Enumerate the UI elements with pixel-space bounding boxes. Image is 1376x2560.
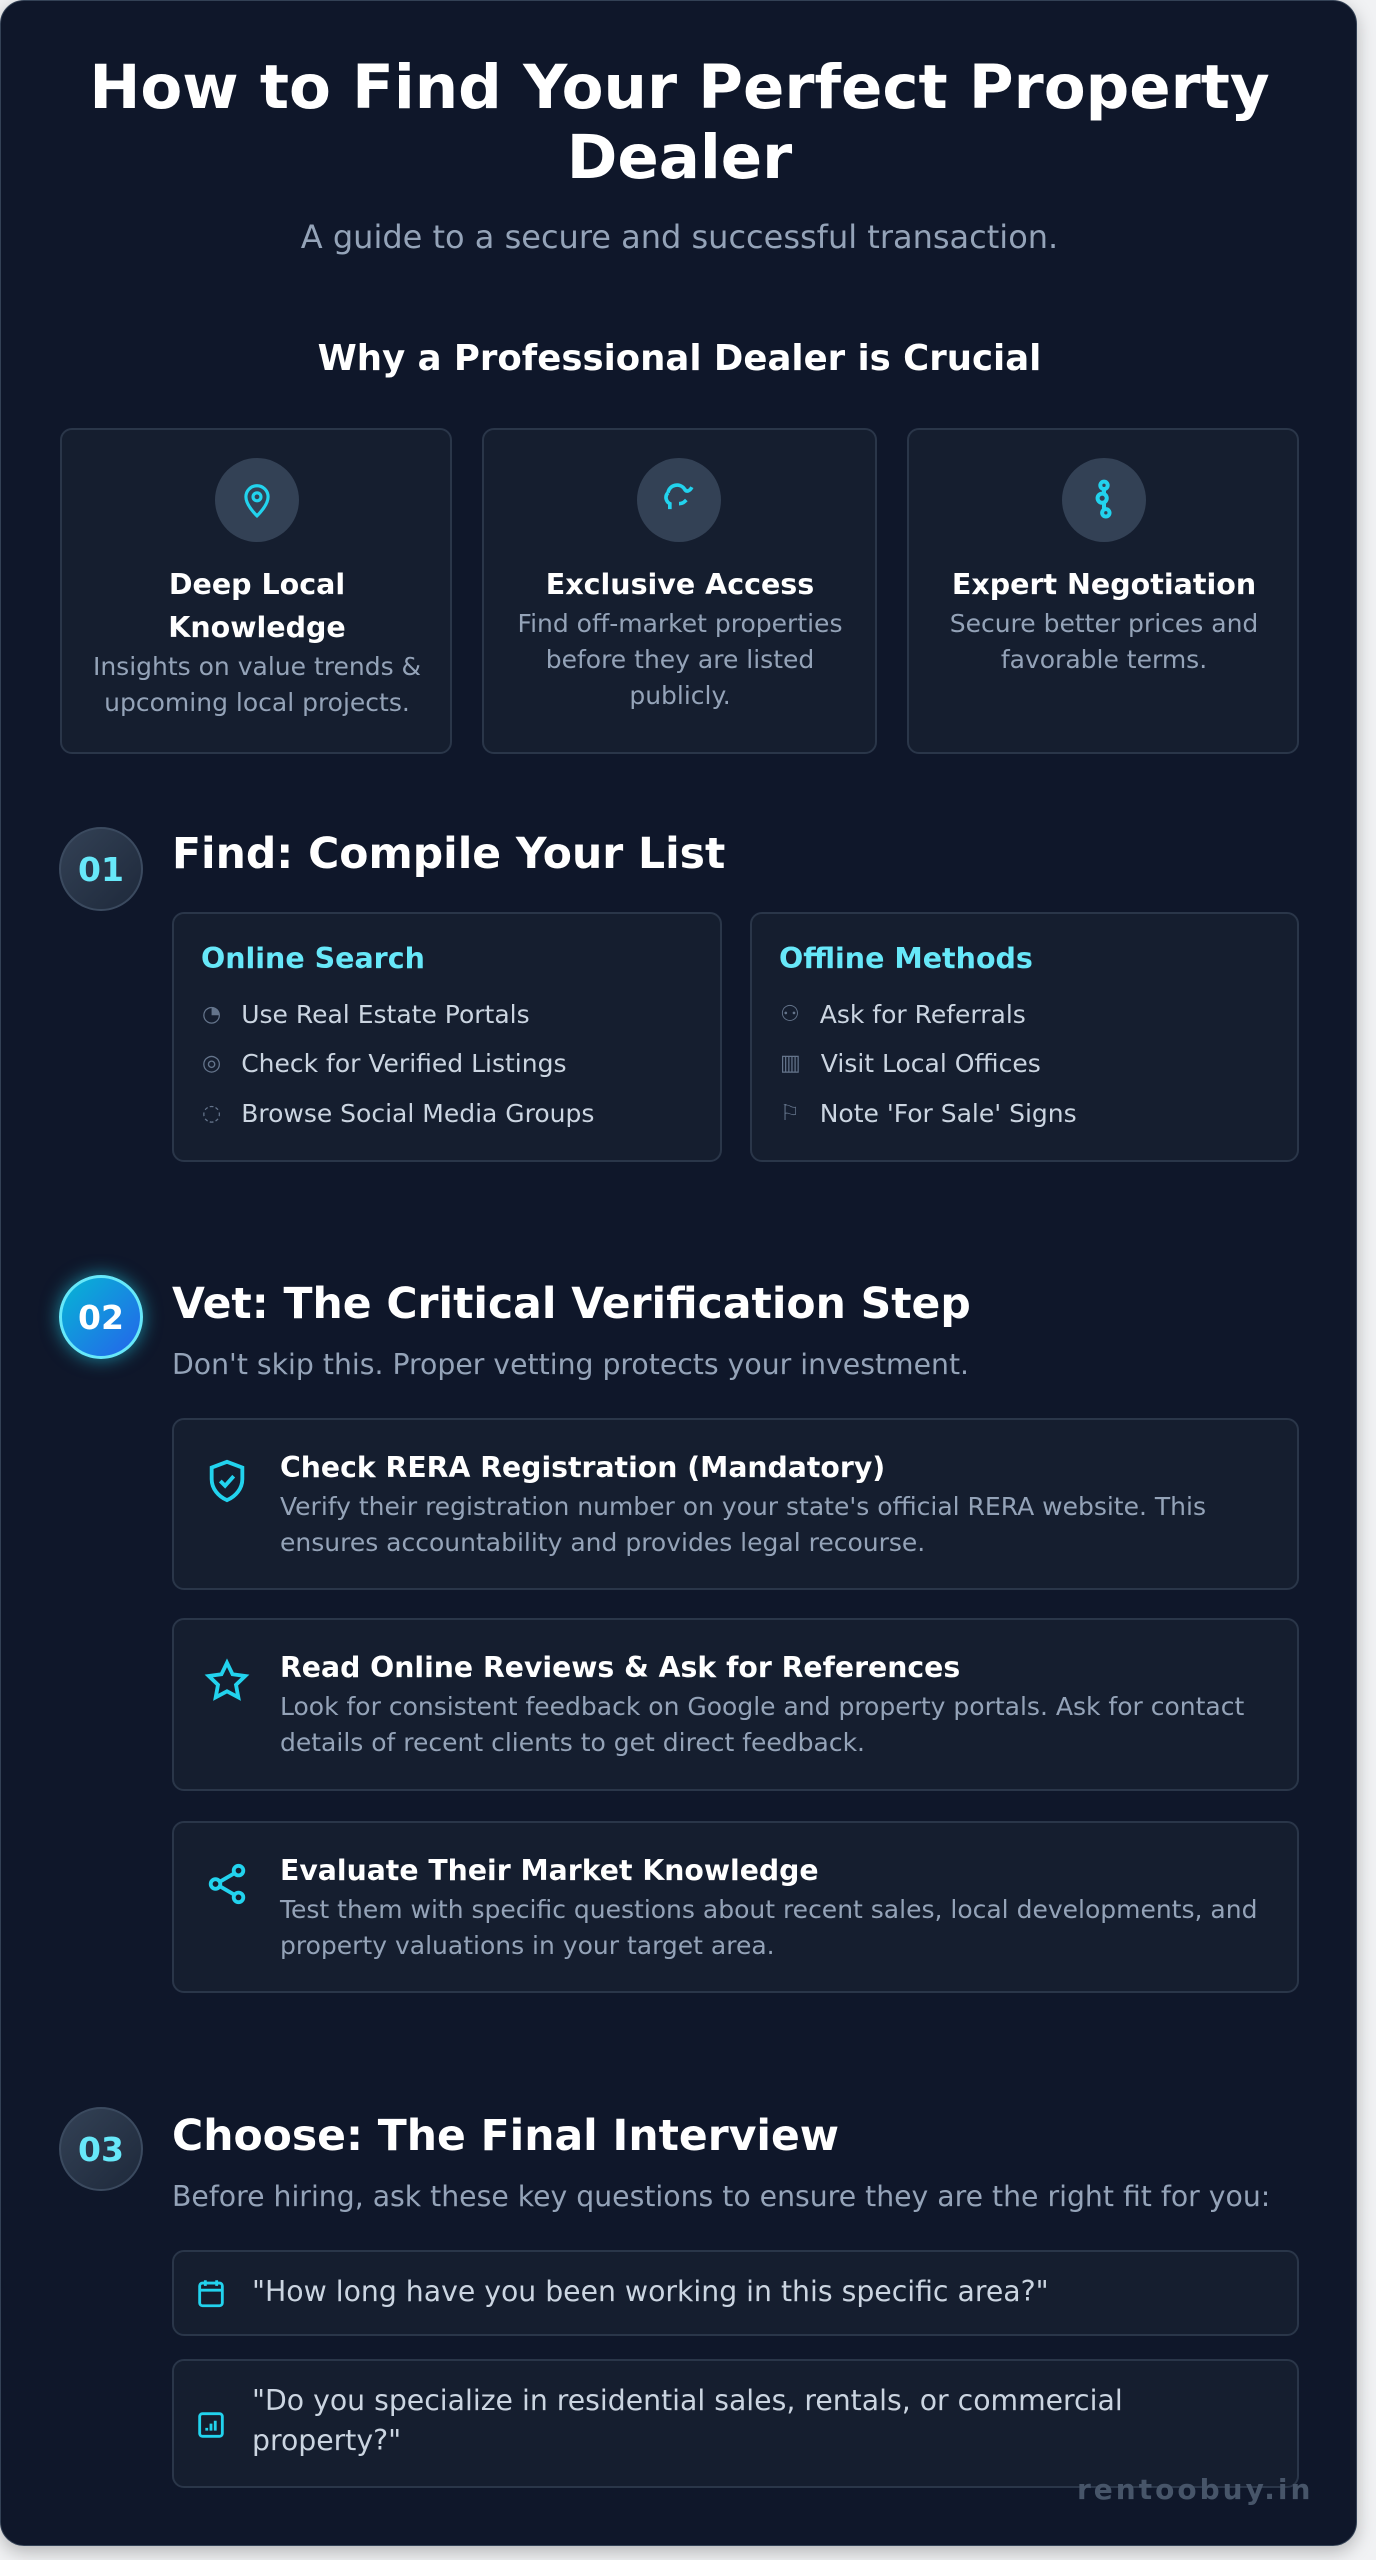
step 02 badge: 02 (78, 1298, 124, 1336)
icon: chart (198, 2412, 224, 2438)
icon: share (208, 1864, 246, 1904)
item: Browse Social Media Groups (241, 1099, 594, 1128)
text: Deep Local (169, 568, 345, 601)
title: How to Find Your Perfect Property (89, 52, 1270, 123)
step 01 badge: 01 (78, 850, 124, 888)
item: Check for Verified Listings (241, 1049, 566, 1078)
item: ◌ (202, 1101, 221, 1126)
title (89, 52, 1270, 193)
subtitle: A guide to a secure and successful transaction. (301, 218, 1058, 256)
item: Note 'For Sale' Signs (820, 1099, 1077, 1128)
text: Knowledge (168, 611, 346, 644)
text: "How long have you been working in this specific area?" (252, 2275, 1049, 2308)
text (93, 568, 421, 717)
step 03 badge (59, 2107, 143, 2191)
subtitle 02: Don't skip this. Proper vetting protects your investment. (172, 1348, 969, 1381)
watermark: rentoobuy.in (1077, 2473, 1313, 2506)
text: Secure better prices and favorable terms. (950, 609, 1258, 674)
panel: expert negotiation (907, 428, 1299, 754)
desc: Verify their registration number on your state's official RERA website. This ensures accountability and provides legal recourse. (280, 1492, 1206, 1557)
heading: Online Search (201, 942, 425, 975)
item: Visit Local Offices (821, 1049, 1041, 1078)
text: Insights on value trends & upcoming local projects. (93, 652, 421, 717)
title: Check RERA Registration (Mandatory) (280, 1451, 885, 1484)
panel: online search (172, 912, 722, 1162)
step 02 badge (59, 1275, 143, 1359)
item: ▥ (780, 1051, 801, 1076)
question 2 (172, 2359, 1299, 2488)
panel: RERA (172, 1418, 1299, 1590)
icon: access (637, 458, 721, 542)
item: ◔ (202, 1002, 221, 1027)
step 03 badge: 03 (78, 2130, 124, 2168)
text: "Do you specialize in residential sales, rentals, or commercial property?" (252, 2384, 1123, 2457)
text: Expert Negotiation (952, 568, 1256, 601)
item: ⚐ (780, 1101, 800, 1126)
icon: calendar (198, 2280, 224, 2308)
panel: offline methods (750, 912, 1299, 1162)
panel: market knowledge (172, 1821, 1299, 1993)
heading 03: Choose: The Final Interview (172, 2112, 839, 2161)
heading: Offline Methods (779, 942, 1033, 975)
panel: reviews (172, 1618, 1299, 1791)
desc: Look for consistent feedback on Google and property portals. Ask for contact details of recent clients to get direct feedback. (280, 1692, 1244, 1757)
icon: negotiation (1062, 458, 1146, 542)
section heading: why: Why a Professional Dealer is Crucial (318, 338, 1041, 379)
desc: Test them with specific questions about recent sales, local developments, and property valuations in your target area. (280, 1895, 1257, 1960)
heading 02: Vet: The Critical Verification Step (172, 1280, 971, 1329)
item: Use Real Estate Portals (241, 1000, 530, 1029)
icon: shield (210, 1460, 244, 1502)
panel: deep local knowledge (60, 428, 452, 754)
icon: star (204, 1658, 250, 1701)
subtitle 03: Before hiring, ask these key questions to ensure they are the right fit for you: (172, 2180, 1270, 2213)
step 01 badge (59, 827, 143, 911)
title: Evaluate Their Market Knowledge (280, 1854, 819, 1887)
question 1 (172, 2250, 1299, 2336)
item: ◎ (202, 1051, 221, 1076)
icon: location pin (215, 458, 299, 542)
title: Read Online Reviews & Ask for References (280, 1651, 960, 1684)
item: ⚇ (780, 1002, 800, 1027)
item: Ask for Referrals (820, 1000, 1026, 1029)
text (950, 568, 1258, 674)
panel: exclusive access (482, 428, 877, 754)
heading 01: Find: Compile Your List (172, 830, 725, 879)
title: Dealer (567, 122, 792, 193)
text: Exclusive Access (546, 568, 814, 601)
text: Find off-market properties before they are listed publicly. (518, 609, 842, 710)
